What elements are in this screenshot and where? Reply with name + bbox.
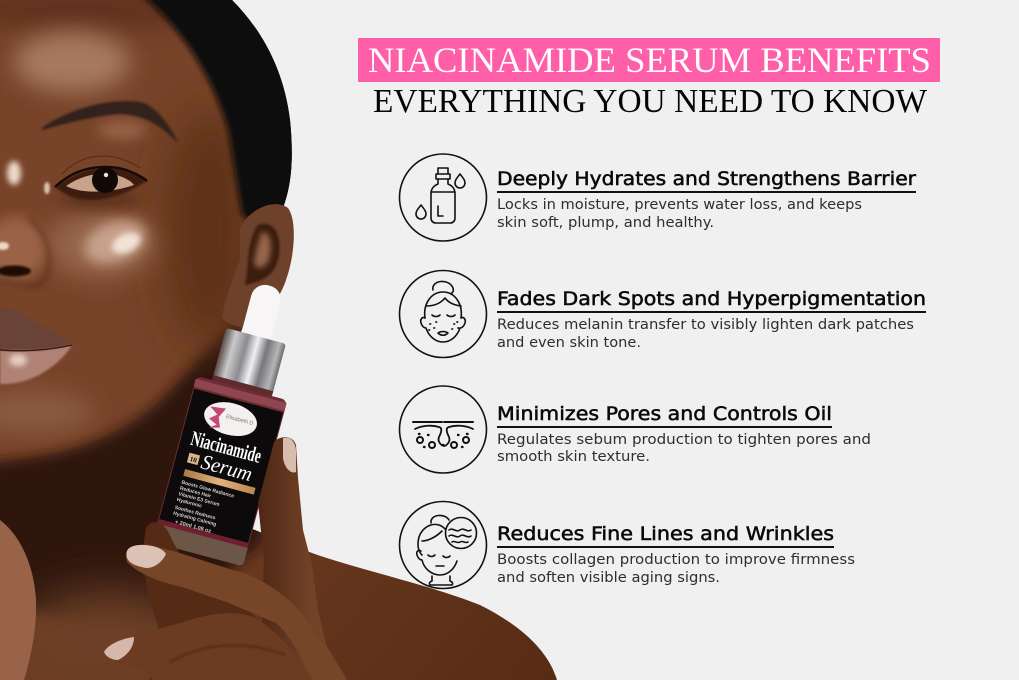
description: Locks in moisture, prevents water loss, and keeps xyxy=(497,197,862,213)
label small print: Vitamin E3 Serum xyxy=(178,491,221,508)
bottle: 10 xyxy=(189,455,198,465)
heading: Reduces Fine Lines and Wrinkles xyxy=(497,523,834,545)
icon: face with wrinkle bubble xyxy=(400,502,486,588)
skin: face, neck and shoulder xyxy=(0,0,560,680)
brand logo xyxy=(200,397,261,442)
product name: Niacinamide xyxy=(188,426,264,468)
palm and middle finger behind bottle xyxy=(143,522,300,680)
description: Boosts collagen production to improve firmness xyxy=(497,552,855,568)
neck shadow below the jaw xyxy=(0,315,265,640)
bottle: Serum xyxy=(199,449,255,486)
thumb xyxy=(126,545,347,680)
eyebrow xyxy=(42,101,178,143)
label small print: Boosts Glow Radiance xyxy=(181,480,235,500)
description xyxy=(497,317,914,351)
label small print: Hyaluronic xyxy=(176,497,203,510)
benefit: fine lines xyxy=(400,502,855,588)
label small print: + 20ml 1.08 oz xyxy=(174,519,212,535)
pointing finger xyxy=(104,613,312,680)
description: smooth skin texture. xyxy=(497,449,650,465)
description: Regulates sebum production to tighten pores and xyxy=(497,432,871,448)
bottle xyxy=(152,273,315,566)
icon: pores in skin xyxy=(400,386,486,473)
finger nail xyxy=(104,637,134,660)
glass body xyxy=(152,376,287,566)
ear xyxy=(222,204,294,327)
description: and soften visible aging signs. xyxy=(497,570,720,586)
title banner: NIACINAMIDE SERUM BENEFITS xyxy=(368,40,931,80)
heading: Deeply Hydrates and Strengthens Barrier xyxy=(497,168,916,190)
thumb nail xyxy=(126,545,166,568)
heading: Fades Dark Spots and Hyperpigmentation xyxy=(497,288,926,310)
benefit: pores xyxy=(400,386,871,473)
benefit: dark spots xyxy=(400,270,926,358)
index finger xyxy=(255,437,347,680)
description xyxy=(497,552,855,586)
label small print: Soothes Redness xyxy=(174,505,216,521)
gold band xyxy=(183,469,256,495)
label small print: Hydrating Calming xyxy=(172,511,217,528)
description: Reduces melanin transfer to visibly lighten dark patches xyxy=(497,317,914,333)
description xyxy=(497,197,862,231)
label small print xyxy=(170,480,235,538)
eye xyxy=(55,156,147,200)
description xyxy=(497,432,871,465)
lips xyxy=(0,308,72,384)
description: and even skin tone. xyxy=(497,335,641,351)
description: skin soft, plump, and healthy. xyxy=(497,215,714,231)
dropper bulb xyxy=(237,282,284,357)
icon: serum bottle and drops xyxy=(400,154,486,241)
hair xyxy=(142,0,292,221)
finger nail xyxy=(283,438,296,472)
label xyxy=(159,389,283,543)
photo: woman holding serum bottle xyxy=(0,0,560,680)
holding hand xyxy=(104,437,347,680)
collar xyxy=(212,328,286,396)
glass neck xyxy=(211,375,273,400)
icon: face with spots xyxy=(400,270,486,358)
benefit: hydration xyxy=(400,154,916,241)
heading: Minimizes Pores and Controls Oil xyxy=(497,403,832,425)
bottle: Elisabeth D xyxy=(225,414,254,427)
label small print: Reduces Hair xyxy=(179,485,212,500)
left hand behind xyxy=(0,520,36,680)
subtitle: EVERYTHING YOU NEED TO KNOW xyxy=(373,83,928,120)
